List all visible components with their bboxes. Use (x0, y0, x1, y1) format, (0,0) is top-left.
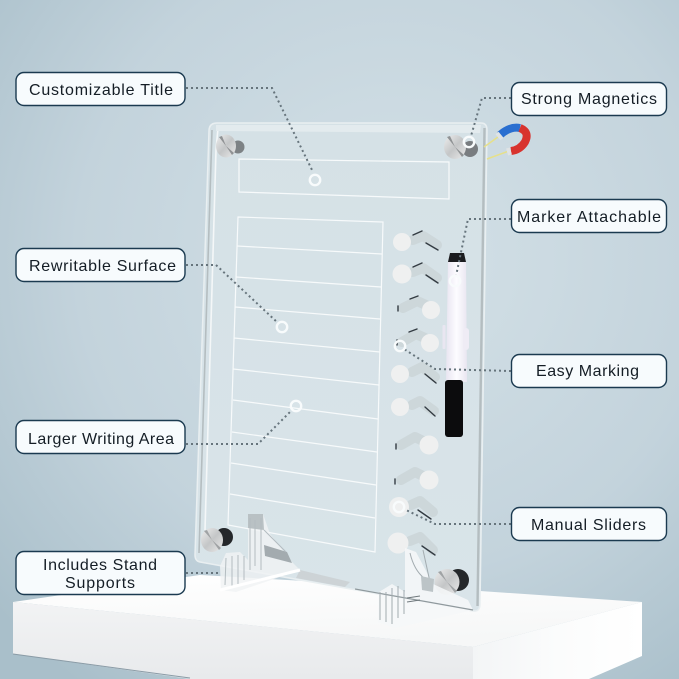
callout: Easy Marking: Easy Marking (536, 363, 639, 380)
callout: Customizable Title (16, 72, 185, 106)
callout: Includes Stand Supports: Includes Stand (43, 557, 157, 574)
callout: Manual Sliders (512, 508, 666, 540)
title outline (239, 159, 449, 199)
screw top right (444, 135, 478, 159)
white pedestal (13, 575, 642, 679)
callout: Marker Attachable (512, 200, 666, 232)
callout: Strong Magnetics: Strong Magnetics (521, 91, 657, 108)
callout: Larger Writing Area (16, 420, 185, 454)
acrylic board (195, 123, 487, 611)
callout: Rewritable Surface: Rewritable Surface (29, 258, 176, 275)
callout: Includes Stand Supports (16, 552, 185, 594)
callout: Larger Writing Area: Larger Writing Area (28, 431, 174, 448)
left stand (220, 514, 300, 592)
shadow under board (296, 570, 350, 587)
dotted leader lines (186, 88, 511, 573)
screw top left (216, 134, 244, 158)
callout: Customizable Title: Customizable Title (29, 82, 173, 99)
callout: Manual Sliders: Manual Sliders (531, 517, 646, 534)
marker pen (442, 253, 469, 437)
marker rings (277, 137, 474, 512)
sliders (395, 231, 438, 555)
screws (201, 134, 478, 595)
callout: Marker Attachable: Marker Attachable (517, 209, 661, 226)
screw bottom right (434, 569, 469, 595)
screw bottom left (201, 528, 233, 552)
slider knobs (388, 233, 440, 554)
icon: horseshoe magnet (484, 128, 527, 159)
writing grid (228, 217, 383, 552)
right stand (355, 548, 473, 628)
callout: Strong Magnetics (512, 82, 666, 116)
callout: Rewritable Surface (16, 248, 185, 282)
callout: Includes Stand Supports: Supports (65, 575, 135, 592)
callout: Easy Marking (512, 354, 666, 388)
